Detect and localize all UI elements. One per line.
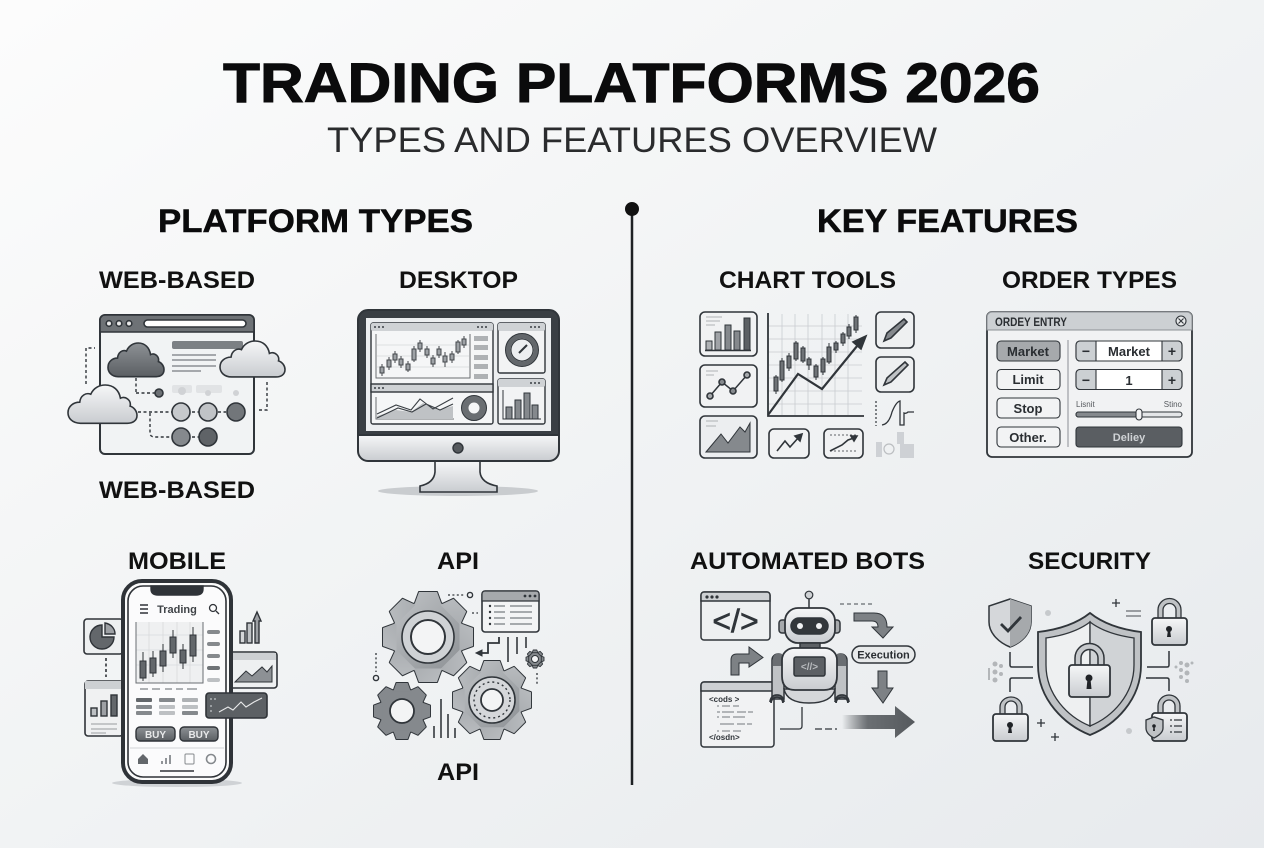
label: desktop: DESKTOP xyxy=(399,267,518,294)
text: market: Market xyxy=(1007,344,1050,359)
label: api: API xyxy=(437,548,479,575)
text: code glyph: </> xyxy=(712,603,759,639)
label: automated bots: AUTOMATED BOTS xyxy=(690,548,925,575)
text: stepper quantity: 1 xyxy=(1125,373,1133,388)
text: plus 2: + xyxy=(1168,372,1176,388)
label: mobile: MOBILE xyxy=(128,548,226,575)
icon: mobile phone app xyxy=(84,581,277,787)
icon: desktop monitor xyxy=(358,310,559,496)
icon: chart tools xyxy=(700,312,914,458)
text: slider right: Stino xyxy=(1164,400,1183,409)
label: web-based repeat: WEB-BASED xyxy=(99,477,255,504)
heading: key features: KEY FEATURES xyxy=(817,203,1078,239)
text: execution pill: Execution xyxy=(857,650,910,662)
text: plus 1: + xyxy=(1168,343,1176,359)
text: buy button left: BUY xyxy=(145,730,166,741)
panel: order entry xyxy=(987,312,1192,457)
icon: automated bots xyxy=(701,591,915,747)
label: order types: ORDER TYPES xyxy=(1002,267,1177,294)
icon: api gears xyxy=(373,591,544,739)
text: minus 2: − xyxy=(1082,372,1090,388)
text: action button: Deliey xyxy=(1113,432,1146,444)
text: robot chest code: <//> xyxy=(801,662,818,673)
text: stop: Stop xyxy=(1014,401,1042,416)
text: stepper market: Market xyxy=(1108,344,1151,359)
icon: security shield and locks xyxy=(988,598,1194,741)
text: other: Other. xyxy=(1009,430,1047,445)
label: chart tools: CHART TOOLS xyxy=(719,267,896,294)
central divider xyxy=(625,202,639,785)
text: app title: Trading xyxy=(157,604,197,616)
text: panel title: ORDEY ENTRY xyxy=(995,315,1067,329)
title: TRADING PLATFORMS 2026 xyxy=(223,51,1040,114)
text: slider left: Lisnit xyxy=(1076,400,1095,409)
text: code open tag: <cods > xyxy=(709,695,740,704)
text: minus 1: − xyxy=(1082,343,1090,359)
text: code close tag: </osdn> xyxy=(709,733,740,742)
heading: platform types: PLATFORM TYPES xyxy=(158,203,473,239)
label: web-based: WEB-BASED xyxy=(99,267,255,294)
text: buy button right: BUY xyxy=(188,730,210,741)
label: api repeat: API xyxy=(437,759,479,786)
label: security: SECURITY xyxy=(1028,548,1151,575)
icon: web-based browser and clouds xyxy=(68,315,285,454)
subtitle: TYPES AND FEATURES OVERVIEW xyxy=(327,121,937,160)
text: limit: Limit xyxy=(1012,372,1044,387)
